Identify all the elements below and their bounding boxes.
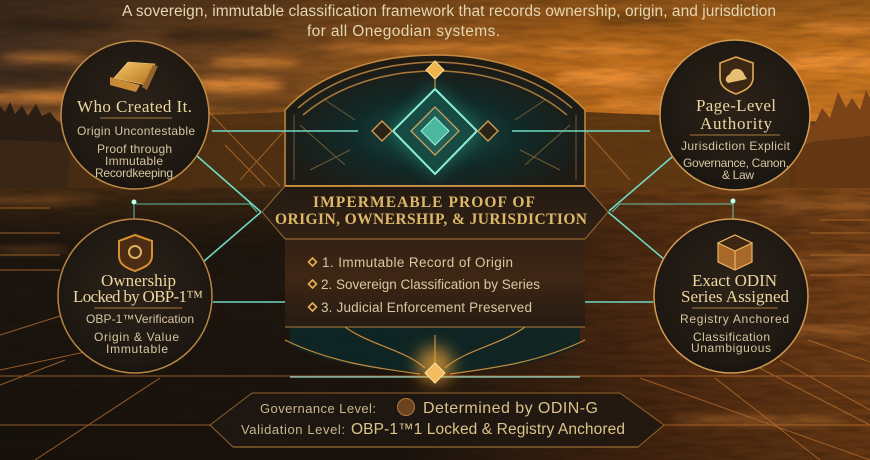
circle: who created it: Who Created It. bbox=[77, 97, 192, 116]
gold diamond top bbox=[426, 61, 444, 79]
background: sunset sky bbox=[0, 0, 870, 192]
list: three proofs: 2. Sovereign Classification by Series bbox=[321, 277, 540, 292]
subtitle: for all Onegodian systems. bbox=[307, 23, 500, 40]
icon: scroll bbox=[110, 62, 158, 92]
circle: page-level authority bbox=[660, 40, 810, 190]
gold diamond bottom bbox=[425, 363, 445, 383]
circle: exact odin series: Series Assigned bbox=[681, 287, 790, 306]
circle: exact odin series: Registry Anchored bbox=[680, 312, 789, 326]
circle: page-level authority: & Law bbox=[722, 168, 754, 182]
icon: shield bbox=[119, 235, 152, 271]
circle: who created it bbox=[61, 41, 209, 189]
governance row: Determined by ODIN-G bbox=[423, 400, 598, 417]
list: three proofs bbox=[308, 255, 540, 315]
background: tree lines and hills bbox=[0, 90, 870, 192]
circle: ownership locked: Locked by OBP-1™ bbox=[73, 287, 203, 306]
validation row: OBP-1™1 Locked & Registry Anchored bbox=[351, 421, 625, 438]
icon: shield bbox=[720, 57, 753, 94]
circle: page-level authority: Governance, Canon, bbox=[683, 156, 789, 170]
circle: ownership locked bbox=[58, 219, 212, 373]
circle: exact odin series: Exact ODIN bbox=[692, 271, 777, 290]
panel heading: ORIGIN, OWNERSHIP, & JURISDICTION bbox=[275, 211, 587, 228]
list: three proofs: 1. Immutable Record of Origin bbox=[322, 255, 513, 270]
icon: medallion bbox=[398, 398, 414, 416]
subtitle bbox=[122, 3, 776, 40]
panel heading bbox=[275, 194, 587, 228]
circle: exact odin series: Classification bbox=[693, 330, 770, 344]
circle: ownership locked: Ownership bbox=[101, 271, 176, 290]
background: ground with perspective lines bbox=[0, 112, 870, 460]
panel: central proof bbox=[262, 186, 608, 327]
circle: who created it: Immutable bbox=[105, 154, 163, 168]
side nodes bbox=[372, 121, 498, 141]
circle: page-level authority: Jurisdiction Explicit bbox=[681, 139, 791, 153]
circle: exact odin series bbox=[654, 219, 808, 373]
panel: governance and validation levels bbox=[210, 393, 664, 447]
teal connector lines bbox=[132, 131, 736, 304]
teal diamond bbox=[390, 85, 480, 177]
lower ornament bbox=[285, 327, 585, 383]
circle: ownership locked: Origin & Value bbox=[94, 330, 179, 344]
circle: ownership locked: OBP-1™Verification bbox=[86, 312, 194, 326]
validation row: Validation Level: bbox=[241, 422, 345, 437]
circle: ownership locked: Immutable bbox=[106, 342, 168, 356]
circle: page-level authority: Authority bbox=[700, 114, 772, 133]
circle: exact odin series: Unambiguous bbox=[691, 341, 771, 355]
circle: who created it: Recordkeeping bbox=[95, 166, 173, 180]
panel heading: IMPERMEABLE PROOF OF bbox=[313, 194, 535, 211]
circle: who created it: Proof through bbox=[97, 142, 172, 156]
arch emblem bbox=[285, 55, 585, 186]
list: three proofs: 3. Judicial Enforcement Preserved bbox=[321, 300, 532, 315]
icon: cube bbox=[718, 235, 752, 270]
circle: page-level authority: Page-Level bbox=[696, 96, 776, 115]
subtitle: A sovereign, immutable classification framework that records ownership, origin, and jurisdiction bbox=[122, 3, 776, 20]
governance row: Governance Level: bbox=[260, 401, 376, 416]
governance row bbox=[260, 398, 598, 417]
circle: who created it: Origin Uncontestable bbox=[77, 124, 195, 138]
